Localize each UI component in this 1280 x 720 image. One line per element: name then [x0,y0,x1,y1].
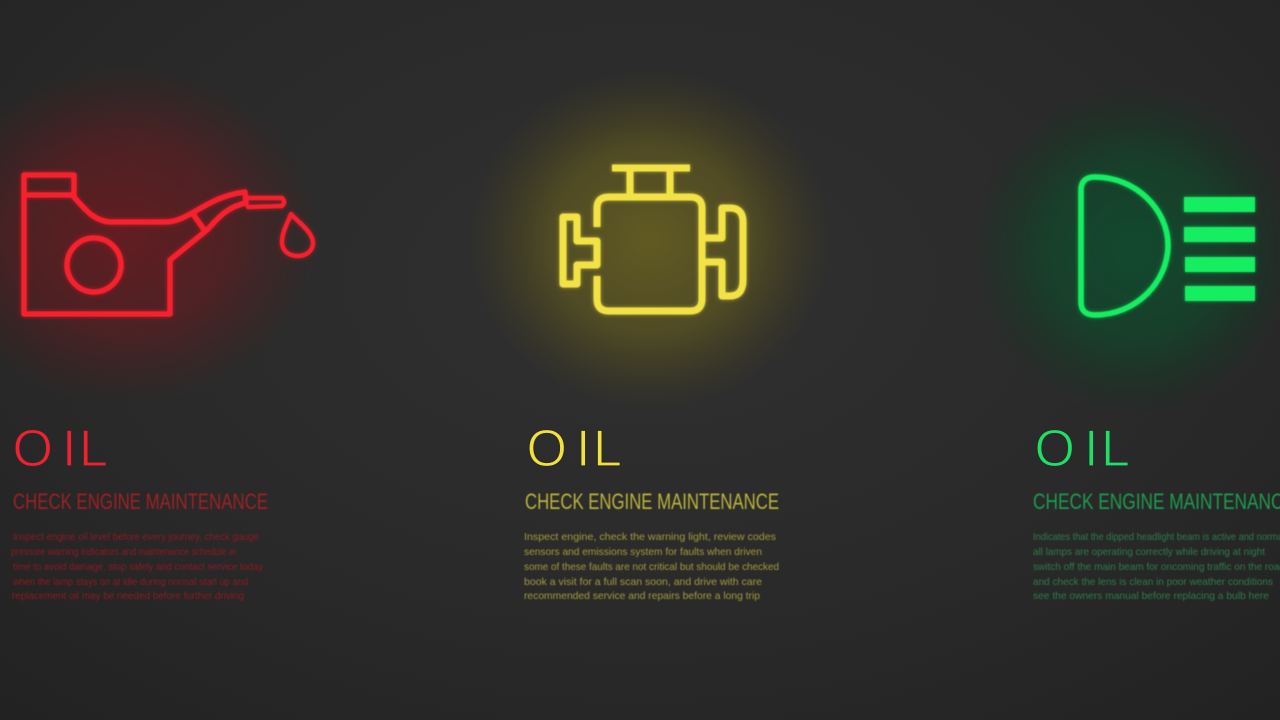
panel: green headlight indicator [970,85,1280,602]
body text: green: see the owners manual before replacing a bulb here [1033,590,1269,602]
subheading: yellow: CHECK ENGINE MAINTENANCE [525,489,779,514]
heading: OIL yellow: OIL [526,420,622,478]
body text: yellow: recommended service and repairs before a long trip [524,590,760,602]
body text: green: and check the lens is clean in poor weather conditions [1033,576,1273,588]
body text: red: when the lamp stays on at idle during normal start up and [12,576,248,588]
panel: yellow engine warning [468,70,832,602]
icon: headlight beam [1081,177,1255,315]
panel: red oil warning [0,65,320,602]
glow: yellow [468,70,832,410]
body text: green [1033,531,1280,602]
body text: yellow: Inspect engine, check the warning light, review codes [524,531,776,543]
glow: red [0,65,320,405]
icon: engine [563,168,743,311]
body text: red: pressure warning indicators and maintenance schedule in [11,546,236,558]
body text: green: all lamps are operating correctly while driving at night [1033,546,1265,558]
body text: red: Inspect engine oil level before every journey, check gauge [13,531,259,543]
body text: yellow [524,531,779,602]
body text: yellow: book a visit for a full scan soon, and drive with care [524,576,762,588]
heading: OIL green: OIL [1034,420,1130,478]
body text: red [11,531,264,602]
body text: red: time to avoid damage, stop safely and contact service today [13,561,264,573]
subheading: red: CHECK ENGINE MAINTENANCE [13,489,268,514]
glow: green [970,85,1280,415]
icon: oil can with drop [24,175,313,314]
body text: yellow: sensors and emissions system for faults when driven [524,546,762,558]
body text: red: replacement oil may be needed before further driving [12,590,244,602]
heading: OIL red: OIL [12,420,108,478]
body text: yellow: some of these faults are not critical but should be checked [524,561,779,573]
